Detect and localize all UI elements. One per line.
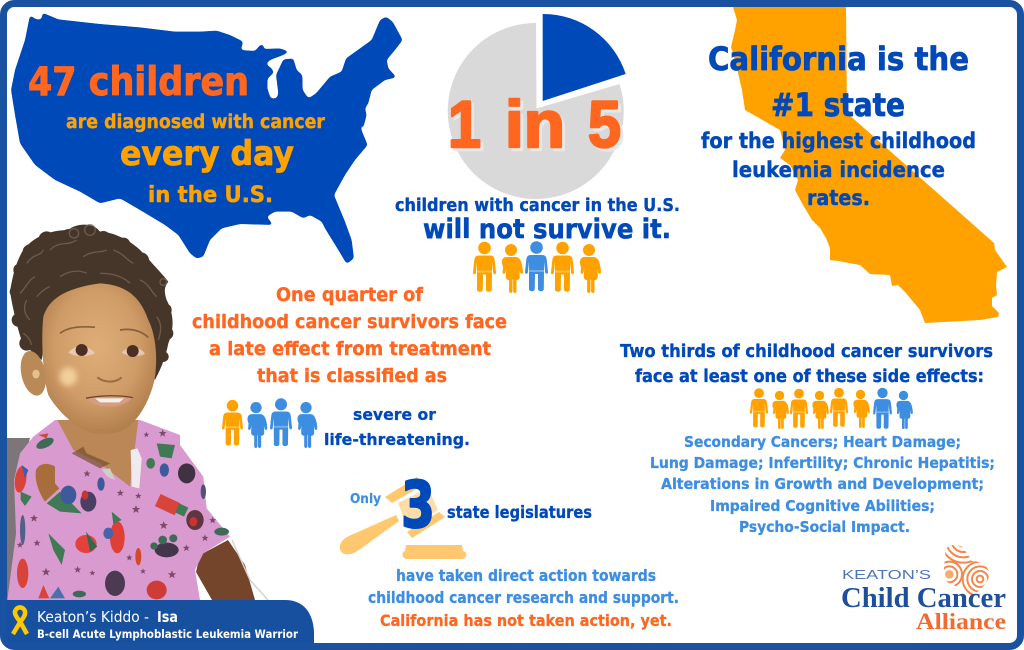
caption badge: Isa bbox=[157, 608, 178, 626]
pie chart: 1 in 5 bbox=[448, 14, 626, 199]
hospital gown bbox=[7, 420, 230, 600]
logo: Alliance: Alliance bbox=[916, 609, 1006, 634]
number shadow: 1 bbox=[451, 90, 484, 164]
headline: California is the #1 state: California is the bbox=[708, 40, 969, 78]
text: highest childhood leukemia rates: rates. bbox=[807, 186, 870, 211]
headline: California is the #1 state: #1 state bbox=[771, 86, 905, 124]
logo: Keaton's Child Cancer Alliance bbox=[842, 545, 1006, 629]
text: one quarter of survivors bbox=[192, 284, 507, 387]
arm tube bbox=[232, 540, 268, 600]
text: severe or life-threatening bbox=[324, 405, 470, 449]
eyes bbox=[68, 346, 145, 356]
text: children with cancer in the U.S.: children with cancer in the U.S. bbox=[395, 196, 680, 216]
arm bbox=[196, 540, 255, 600]
logo: Keaton's: KEATON’S bbox=[842, 567, 931, 582]
text: only: Only bbox=[350, 491, 381, 507]
number: 1 in 5: 1 bbox=[448, 87, 481, 161]
mouth bbox=[87, 396, 132, 406]
number shadow bbox=[451, 90, 624, 164]
text: direct action bbox=[368, 566, 679, 607]
headline: California is the #1 state bbox=[708, 40, 969, 124]
hair curls bbox=[20, 225, 167, 345]
icons: four children bbox=[222, 398, 317, 448]
map: United States bbox=[11, 13, 403, 264]
logo: Child Cancer: Child Cancer bbox=[841, 582, 1006, 614]
headline: 47 children: 47 children bbox=[28, 60, 249, 105]
text: direct action: childhood cancer research and support. bbox=[368, 588, 679, 607]
number: 1 in 5: 5 bbox=[588, 87, 621, 161]
number: 1 in 5: in bbox=[505, 87, 565, 161]
text: are diagnosed with cancer: are diagnosed with cancer bbox=[66, 112, 326, 133]
text: one quarter of survivors: that is classified as bbox=[257, 365, 447, 387]
text: highest childhood leukemia rates: for the highest childhood bbox=[701, 129, 976, 154]
text: in the U.S.: in the U.S. bbox=[148, 182, 273, 208]
list: side effects: Secondary Cancers; Heart Damage; bbox=[684, 433, 961, 451]
icons: eight children bbox=[750, 388, 913, 429]
photo: Isa bbox=[7, 225, 268, 600]
text: state legislatures: state legislatures bbox=[447, 503, 592, 522]
text: severe or life-threatening: severe or bbox=[353, 405, 436, 424]
icon: gavel bbox=[340, 477, 466, 559]
text: California has not taken action: California has not taken action, yet. bbox=[380, 611, 672, 630]
number shadow: in bbox=[508, 90, 568, 164]
shoulder opening bbox=[36, 464, 59, 502]
neck bbox=[57, 420, 138, 487]
text: highest childhood leukemia rates bbox=[701, 129, 976, 211]
text: two thirds of survivors: face at least one of these side effects: bbox=[635, 367, 984, 387]
couch bbox=[7, 438, 30, 600]
head bbox=[10, 225, 173, 434]
list: side effects: Alterations in Growth and Development; bbox=[661, 475, 984, 493]
text: severe or life-threatening: life-threatening. bbox=[324, 430, 470, 449]
number shadow: 5 bbox=[591, 90, 624, 164]
ear bbox=[20, 351, 46, 396]
nose bbox=[97, 377, 122, 382]
caption diagnosis: B-cell Acute Lymphoblastic Leukemia Warrior bbox=[37, 627, 298, 641]
icons: five children bbox=[473, 241, 601, 293]
text: every day: every day bbox=[120, 134, 294, 174]
map: California bbox=[731, 7, 1007, 323]
eyebrows bbox=[60, 327, 148, 337]
text: direct action: have taken direct action towards bbox=[396, 566, 656, 585]
central line dressing bbox=[131, 448, 142, 488]
logo mark bbox=[944, 545, 989, 595]
text: one quarter of survivors: One quarter of bbox=[276, 284, 424, 306]
text: two thirds of survivors bbox=[620, 342, 993, 387]
text: one quarter of survivors: childhood cancer survivors face bbox=[192, 311, 507, 333]
list: side effects: Lung Damage; Infertility; Chronic Hepatitis; bbox=[650, 454, 995, 472]
face bbox=[42, 283, 156, 434]
caption badge bbox=[7, 600, 314, 643]
list: side effects: Impaired Cognitive Abilities; bbox=[710, 497, 935, 515]
text: will not survive it.: will not survive it. bbox=[423, 214, 671, 245]
caption name: Keaton’s Kiddo - bbox=[37, 608, 149, 626]
text: one quarter of survivors: a late effect from treatment bbox=[209, 338, 491, 360]
icon: yellow ribbon bbox=[13, 607, 27, 634]
list: side effects: Psycho-Social Impact. bbox=[739, 518, 910, 536]
text: two thirds of survivors: Two thirds of childhood cancer survivors bbox=[620, 342, 993, 362]
text: highest childhood leukemia rates: leukemia incidence bbox=[732, 158, 945, 183]
print stars bbox=[17, 429, 216, 578]
number: 1 in 5 bbox=[448, 87, 621, 161]
hair bbox=[10, 225, 173, 380]
number: 3: 3 bbox=[401, 469, 435, 543]
list: side effects bbox=[650, 433, 995, 536]
rockets and prints bbox=[13, 433, 229, 599]
